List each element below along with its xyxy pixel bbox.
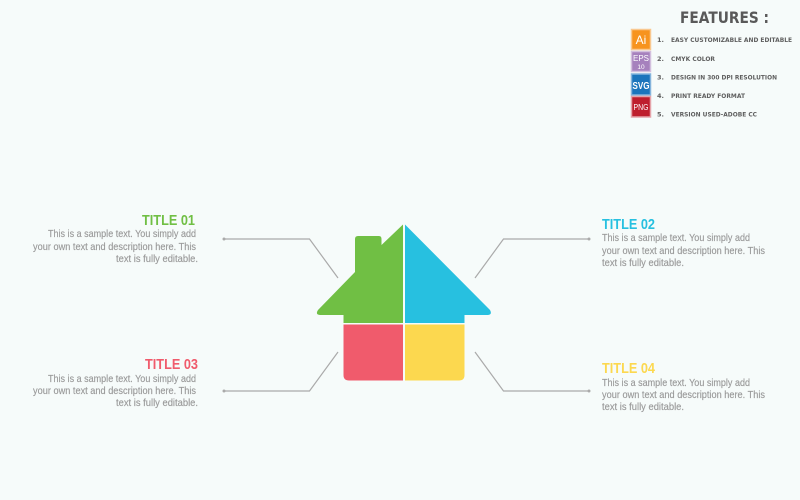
features heading: FEATURES : — [680, 8, 769, 27]
feature list: PRINT READY FORMAT — [671, 92, 746, 100]
text block: title 04: TITLE 04 — [602, 360, 656, 377]
feature list: VERSION USED-ADOBE CC — [671, 110, 757, 118]
house: red wall section — [344, 324, 403, 380]
text block: title 04: This is a sample text. You simply add — [602, 377, 750, 389]
icon: SVG format — [632, 74, 650, 95]
icon: SVG format: SVG — [632, 81, 650, 92]
connector: title 03 — [222, 352, 338, 392]
icon: Ai format: Ai — [636, 33, 646, 47]
text block: title 03 — [33, 356, 198, 409]
text block: title 04: text is fully editable. — [602, 401, 684, 413]
icon: EPS format: 10 — [637, 64, 645, 71]
text block: title 01: your own text and description here. This — [33, 241, 196, 253]
text block: title 04: your own text and description here. This — [602, 389, 765, 401]
connector: title 02 — [475, 238, 590, 278]
text block: title 01 — [33, 212, 198, 265]
text block: title 01: This is a sample text. You simply add — [48, 228, 196, 240]
text block: title 02: TITLE 02 — [602, 216, 655, 233]
text block: title 02: your own text and description here. This — [602, 245, 765, 257]
feature list: 3. — [657, 74, 664, 82]
features panel — [632, 8, 792, 118]
house: yellow wall section — [405, 324, 464, 380]
icon: EPS format — [632, 52, 650, 72]
text block: title 03: text is fully editable. — [116, 397, 198, 409]
text block: title 04 — [602, 360, 765, 413]
connector: title 04 — [475, 352, 590, 392]
text block: title 03: This is a sample text. You simply add — [48, 373, 196, 385]
text block: title 01: text is fully editable. — [116, 253, 198, 265]
icon: EPS format: EPS — [633, 54, 649, 63]
text block: title 03: TITLE 03 — [145, 356, 198, 373]
feature list: 2. — [657, 55, 664, 63]
connector: title 01 — [222, 238, 338, 278]
feature list — [657, 36, 792, 118]
feature list: 5. — [657, 110, 664, 118]
feature list: DESIGN IN 300 DPI RESOLUTION — [671, 74, 777, 82]
text block: title 02: This is a sample text. You simply add — [602, 232, 750, 244]
house: blue roof section — [405, 224, 491, 323]
house diagram — [317, 224, 491, 380]
feature list: 4. — [657, 92, 664, 100]
text block: title 01: TITLE 01 — [142, 212, 195, 229]
icon: PNG format — [632, 96, 650, 117]
icon: Ai format — [632, 30, 650, 50]
house: green roof section with chimney — [317, 224, 403, 323]
icon: PNG format: PNG — [634, 103, 648, 112]
text block: title 02: text is fully editable. — [602, 257, 684, 269]
feature list: CMYK COLOR — [671, 55, 715, 63]
text block: title 02 — [602, 216, 765, 269]
feature list: 1. — [657, 36, 664, 44]
text block: title 03: your own text and description here. This — [33, 385, 196, 397]
